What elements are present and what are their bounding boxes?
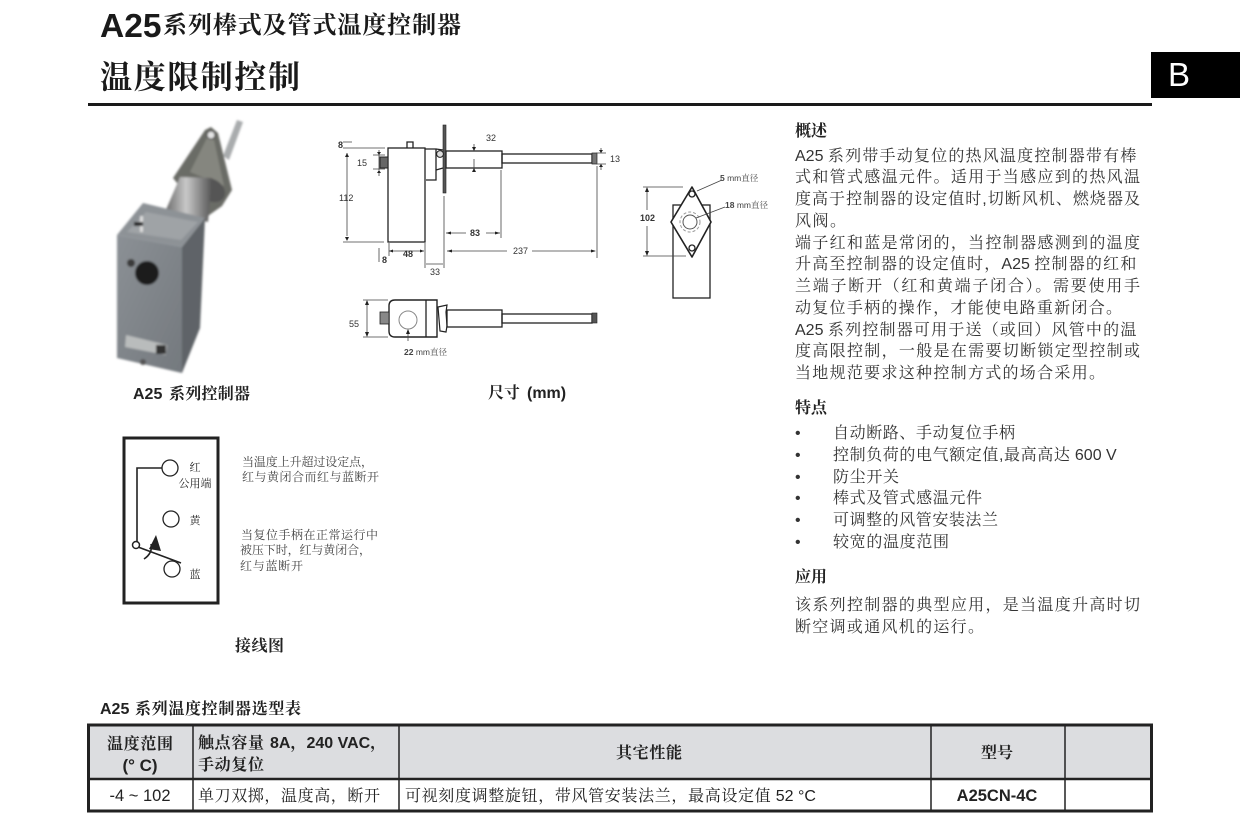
overview text: 风阀。 — [795, 212, 846, 230]
overview text: 端子红和蓝是常闭的，当控制器感测到的温度 — [795, 233, 1140, 252]
dimension labels: 8 — [338, 140, 343, 150]
terminal labels: 公用端 — [178, 476, 212, 490]
overview text: 式和管式感温元件。适用于当感应到的热风温 — [795, 168, 1140, 186]
table title: A25 — [100, 701, 129, 718]
overview text: 兰端子断开（红和黄端子闭合）。需要使用手 — [795, 276, 1140, 295]
dimension labels: 33 — [430, 267, 440, 277]
dimension labels — [338, 133, 620, 277]
feature list: • — [795, 447, 801, 464]
header cells: 型号 — [981, 744, 1013, 762]
caption: photo: 系列控制器 — [169, 384, 250, 403]
wiring notes: 被压下时，红与黄闭合， — [240, 542, 371, 557]
section tab B: B — [1168, 56, 1190, 93]
wiring notes: 红与黄闭合而红与蓝断开 — [242, 469, 379, 484]
caption: dimensions: (mm) — [527, 385, 566, 402]
common wire and switch lever — [137, 468, 181, 563]
wiring notes: 红与蓝断开 — [240, 558, 303, 573]
feature list: • — [795, 425, 801, 442]
sensing tube — [446, 151, 597, 168]
header cells — [107, 733, 1013, 775]
application text — [795, 595, 1140, 636]
overview text: 度高于控制器的设定值时,切断风机、燃烧器及 — [795, 189, 1140, 208]
page header — [88, 8, 1152, 106]
caption: dimensions: 尺寸 — [488, 383, 520, 402]
dimension labels: 32 — [486, 133, 496, 143]
feature list: 较宽的温度范围 — [833, 533, 949, 551]
header cells: 其宅性能 — [616, 743, 682, 762]
terminals — [162, 460, 180, 577]
header rule — [88, 103, 1152, 106]
header cells: (° C) — [122, 756, 158, 775]
terminal labels: 蓝 — [190, 567, 200, 581]
dimension labels: 83 — [470, 228, 480, 238]
dimension labels: 112 — [339, 193, 353, 203]
dimension lines — [343, 142, 606, 268]
data row: -4 ~ 102 — [109, 787, 171, 805]
data row: A25CN-4C — [957, 787, 1037, 805]
terminal labels: 红 — [190, 461, 200, 474]
dimension drawing: top view: 22 mm直径 — [404, 347, 447, 357]
reset arrow — [144, 535, 161, 559]
dimension labels: 237 — [513, 246, 528, 256]
features section — [795, 398, 1117, 551]
subtitle: product series name: 系列棒式及管式温度控制器 — [163, 11, 461, 39]
dimension drawing: top view: 55 — [349, 319, 359, 329]
dimension drawing: flange front view — [640, 173, 768, 298]
feature list: 防尘开关 — [833, 468, 899, 486]
heading: overview: 概述 — [795, 121, 828, 140]
terminal labels — [178, 461, 212, 581]
overview text: 当地规范要求这种控制方式的场合采用。 — [795, 363, 1105, 382]
application section — [795, 568, 1140, 636]
caption: photo: A25 — [133, 386, 162, 403]
wiring notes — [240, 454, 379, 573]
table frame and dividers — [88, 725, 1152, 811]
dimension labels: 8 — [382, 255, 387, 265]
data row — [109, 786, 1037, 805]
feature list: • — [795, 512, 801, 529]
heading: application: 应用 — [795, 568, 827, 586]
dimension labels: 48 — [403, 249, 413, 259]
heading: features: 特点 — [795, 398, 828, 417]
data row: 可视刻度调整旋钮，带风管安装法兰，最高设定值 52 °C — [405, 786, 816, 805]
application text: 该系列控制器的典型应用，是当温度升高时切 — [795, 595, 1140, 614]
heading: temperature limit control: 温度限制控制 — [100, 59, 300, 95]
application text: 断空调或通风机的运行。 — [795, 618, 984, 636]
overview text: A25 系列控制器可用于送（或回）风管中的温 — [795, 321, 1138, 339]
dimension labels: 15 — [357, 158, 367, 168]
feature list: • — [795, 469, 801, 486]
dimension drawing: flange front view: 18 mm直径 — [725, 200, 768, 210]
overview text: A25 系列带手动复位的热风温度控制器带有棒 — [795, 147, 1138, 165]
feature list: • — [795, 490, 801, 507]
feature list: • — [795, 534, 801, 551]
feature list: 可调整的风管安装法兰 — [833, 510, 998, 529]
wiring notes: 当复位手柄在正常运行中 — [241, 527, 378, 542]
selection table — [88, 725, 1152, 811]
dimension arrows — [345, 147, 603, 252]
feature list: 自动断路、手动复位手柄 — [833, 424, 1015, 442]
overview text: 度高限控制，一般是在需要切断锁定型控制或 — [795, 341, 1140, 360]
data row: 单刀双掷，温度高，断开 — [198, 786, 380, 805]
feature list — [795, 424, 1117, 551]
feature list: 控制负荷的电气额定值,最高高达 600 V — [833, 445, 1117, 464]
dimension drawing: top view — [349, 300, 597, 357]
section tab B — [1151, 52, 1240, 98]
terminal labels: 黄 — [190, 513, 202, 527]
header cells: 温度范围 — [107, 734, 173, 753]
dimension drawing: side elevation — [338, 125, 620, 277]
product photo: A25 controller — [117, 120, 243, 373]
feature list: 棒式及管式感温元件 — [833, 489, 982, 507]
wiring diagram — [124, 438, 218, 603]
mounting plate — [443, 125, 446, 193]
housing — [380, 142, 443, 242]
caption: wiring: 接线图 — [235, 636, 284, 655]
wiring notes: 当温度上升超过设定点， — [242, 454, 373, 469]
dimension drawing: flange front view: 102 — [640, 213, 655, 223]
overview text — [795, 147, 1140, 382]
table title: 系列温度控制器选型表 — [135, 699, 301, 718]
title: product series: A25 — [100, 8, 161, 45]
header cells: 手动复位 — [198, 755, 264, 774]
table header row background — [88, 725, 1152, 779]
overview text: 升高至控制器的设定值时，A25 控制器的红和 — [795, 254, 1138, 273]
dimension labels: 13 — [610, 154, 620, 164]
header cells: 8A，240 VAC， — [270, 735, 386, 753]
overview section — [795, 121, 1140, 382]
dimension drawing: flange front view: 5 mm直径 — [720, 173, 759, 183]
header cells: 触点容量 — [198, 733, 264, 752]
overview text: 动复位手柄的操作，才能使电路重新闭合。 — [795, 299, 1122, 317]
